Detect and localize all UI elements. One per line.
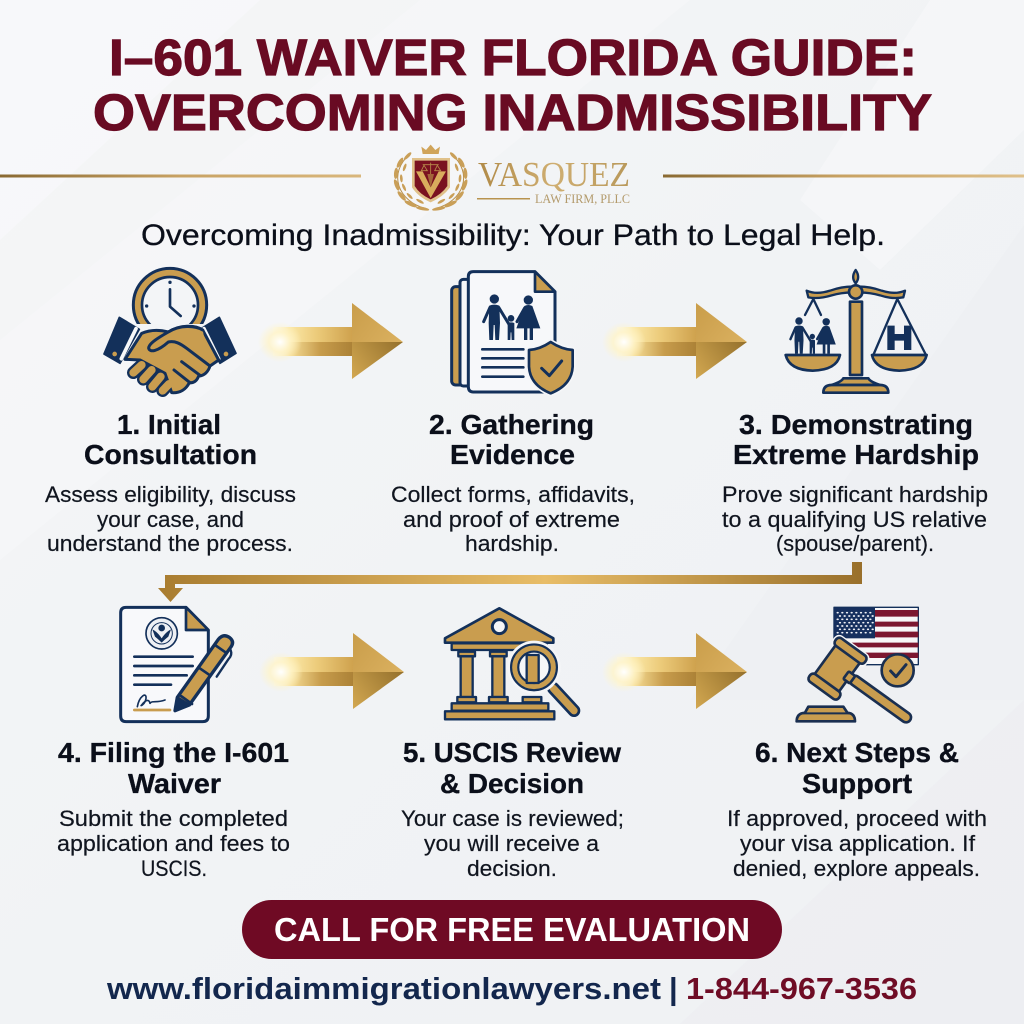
step 5 description: Your case is reviewed;: [401, 806, 624, 831]
step 1 description: understand the process.: [47, 531, 293, 556]
step 6 heading: Support: [802, 768, 912, 799]
gold divider right: [663, 174, 1024, 178]
text: step 6: [727, 737, 987, 881]
step 4 description: USCIS.: [141, 856, 207, 881]
icon: handshake and clock: [104, 268, 236, 393]
text: step 3: [722, 409, 988, 556]
step 5 description: decision.: [467, 856, 557, 881]
text: step 5: [401, 737, 624, 881]
arrow: step 4 to 5: [259, 633, 404, 709]
arrow: step 1 to 2: [258, 303, 403, 379]
contact line: |: [669, 971, 678, 1006]
step 1 heading: [84, 409, 257, 470]
contact line: www.floridaimmigrationlawyers.net: [106, 971, 661, 1006]
icon: courthouse with magnifier: [445, 608, 574, 719]
step 5 heading: 5. USCIS Review: [403, 737, 621, 768]
title: OVERCOMING INADMISSIBILITY: [93, 84, 932, 141]
step 3 description: to a qualifying US relative: [722, 507, 987, 532]
step 5 heading: & Decision: [440, 768, 584, 799]
step 3 heading: 3. Demonstrating: [739, 409, 973, 440]
US flag: [834, 607, 918, 665]
text: step 1: [45, 409, 296, 556]
step 6 description: If approved, proceed with: [727, 806, 987, 831]
text: step 2: [391, 409, 635, 556]
icon: gavel with US flag: [797, 607, 918, 721]
call to action button: CALL FOR FREE EVALUATION: [274, 911, 750, 948]
shaking hands: [104, 317, 236, 393]
icon: family document with shield: [452, 272, 573, 393]
step 1 heading: Consultation: [84, 439, 257, 470]
gold divider left: [0, 174, 361, 178]
step 1 description: your case, and: [97, 507, 244, 532]
title: I–601 WAIVER FLORIDA GUIDE:: [109, 29, 917, 86]
step 6 heading: 6. Next Steps &: [755, 737, 959, 768]
step 3 heading: Extreme Hardship: [733, 439, 979, 470]
step 1 description: [45, 482, 296, 556]
arrow: step 5 to 6: [602, 633, 747, 709]
step 3 heading: [733, 409, 979, 470]
arrow: step 2 to 3: [602, 303, 747, 379]
step 2 heading: 2. Gathering: [429, 409, 594, 440]
arrow: connector from step 3 to step 4: [158, 562, 862, 602]
step 2 description: hardship.: [465, 531, 559, 556]
text: step 4: [57, 737, 290, 881]
step 5 description: [401, 806, 624, 881]
step 1 heading: 1. Initial: [117, 409, 221, 440]
step 4 description: [57, 806, 290, 881]
step 3 description: [722, 482, 988, 556]
step 3 description: (spouse/parent).: [776, 531, 934, 556]
step 2 description: Collect forms, affidavits,: [391, 482, 635, 507]
logo emblem: [393, 145, 469, 211]
step 4 description: application and fees to: [57, 831, 290, 856]
icon: scales of justice: [786, 270, 927, 393]
logo: Vasquez Law Firm: [393, 145, 630, 211]
icon: signed form with pen: [121, 607, 233, 722]
step 4 heading: [58, 737, 289, 799]
step 2 heading: [429, 409, 594, 470]
step 6 description: your visa application. If: [740, 831, 976, 856]
logo subline: LAW FIRM, PLLC: [535, 191, 630, 206]
step 4 heading: Waiver: [128, 768, 221, 799]
subtitle: Overcoming Inadmissibility: Your Path to Legal Help.: [141, 219, 885, 252]
step 5 description: you will receive a: [424, 831, 600, 856]
step 2 description: and proof of extreme: [403, 507, 620, 532]
logo wordmark: VASQUEZ: [478, 155, 630, 194]
step 2 description: [391, 482, 635, 556]
step 6 description: [727, 806, 987, 881]
call to action button: [242, 900, 782, 959]
title: [93, 29, 932, 141]
step 5 heading: [403, 737, 621, 799]
clock: [130, 268, 210, 344]
contact line: 1-844-967-3536: [686, 971, 917, 1006]
contact line: [106, 971, 917, 1006]
step 6 heading: [755, 737, 959, 799]
step 1 description: Assess eligibility, discuss: [45, 482, 296, 507]
step 2 heading: Evidence: [450, 439, 575, 470]
step 4 heading: 4. Filing the I-601: [58, 737, 289, 768]
step 3 description: Prove significant hardship: [722, 482, 988, 507]
step 6 description: denied, explore appeals.: [733, 856, 980, 881]
step 4 description: Submit the completed: [59, 806, 288, 831]
